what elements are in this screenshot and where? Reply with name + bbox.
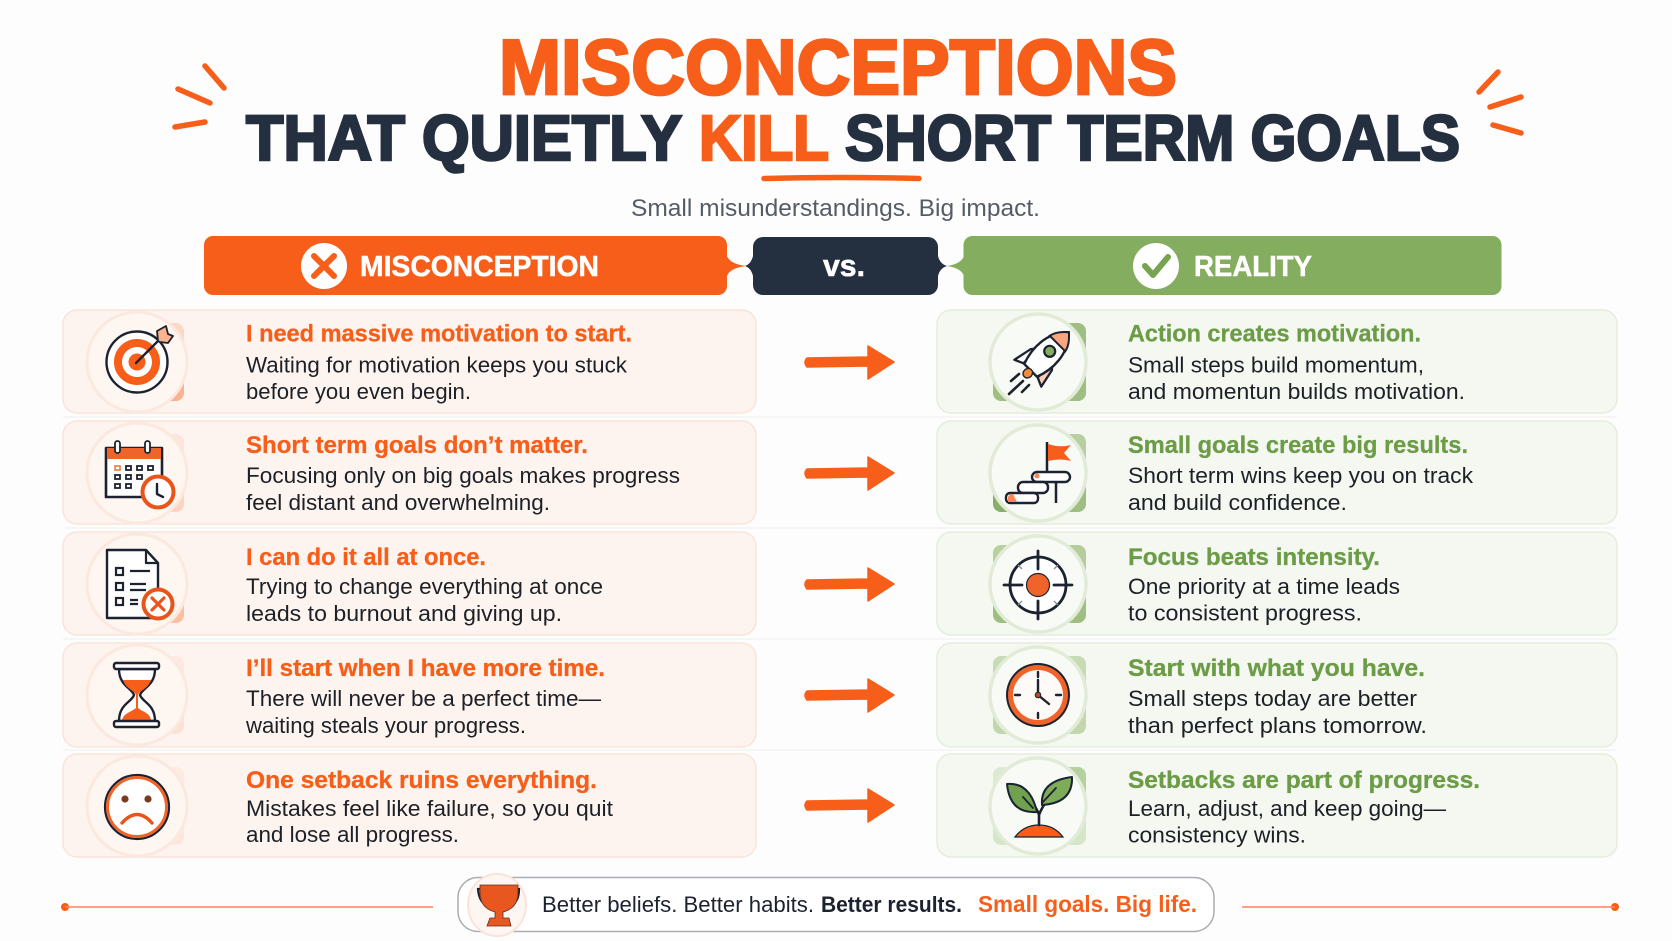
heading and text: I’ll start when I have more time. xyxy=(246,655,605,682)
heading and text: Learn, adjust, and keep going— xyxy=(1128,796,1446,821)
panel: reality row 2 xyxy=(937,421,1617,524)
footer right line xyxy=(1242,903,1619,911)
panel: reality row 1 xyxy=(937,310,1617,413)
heading and text: Small goals create big results. xyxy=(1128,432,1468,459)
title line 2 xyxy=(246,102,1460,174)
icon: checklist with x xyxy=(87,534,187,634)
icon: calendar with clock xyxy=(87,423,187,523)
heading and text: Short term goals don’t matter. xyxy=(246,432,588,459)
panel: reality row 3 xyxy=(937,532,1617,635)
heading and text: Mistakes feel like failure, so you quit xyxy=(246,796,613,821)
footer message: Better results. xyxy=(821,892,962,917)
arrow row 1 xyxy=(805,346,894,379)
icon: rocket xyxy=(990,314,1086,410)
heading and text: Setbacks are part of progress. xyxy=(1128,767,1480,794)
heading and text xyxy=(246,767,613,847)
heading and text: Trying to change everything at once xyxy=(246,574,603,599)
panel: reality row 4 xyxy=(937,643,1617,747)
heading and text: waiting steals your progress. xyxy=(245,713,526,738)
icon: trophy xyxy=(468,874,526,936)
heading and text xyxy=(246,544,603,626)
title underline xyxy=(764,178,919,179)
heading and text: Small steps today are better xyxy=(1128,686,1417,711)
heading and text xyxy=(1128,432,1474,515)
title line 2: SHORT TERM GOALS xyxy=(845,102,1460,174)
heading and text: Focus beats intensity. xyxy=(1128,544,1380,571)
arrow row 3 xyxy=(805,568,894,601)
icon: crosshair focus xyxy=(990,536,1086,632)
footer message: Small goals. Big life. xyxy=(978,891,1197,917)
arrow row 2 xyxy=(805,457,894,490)
heading and text xyxy=(1128,544,1400,626)
heading and text: consistency wins. xyxy=(1128,822,1306,848)
column header: misconception: MISCONCEPTION xyxy=(360,251,599,283)
column header: reality: REALITY xyxy=(1194,251,1312,283)
heading and text: I can do it all at once. xyxy=(246,544,486,571)
icon: sad face xyxy=(87,756,187,856)
heading and text xyxy=(246,320,632,404)
panel: reality row 5 xyxy=(937,754,1617,857)
subtitle: Small misunderstandings. Big impact. xyxy=(631,195,1040,222)
icon: right spark lines xyxy=(1479,72,1521,133)
heading and text: Action creates motivation. xyxy=(1128,320,1421,348)
icon: x circle xyxy=(301,243,347,289)
footer message xyxy=(542,891,1197,917)
heading and text: and build confidence. xyxy=(1128,490,1347,515)
icon: clock xyxy=(990,647,1086,743)
panel: misconception row 1 xyxy=(63,310,756,413)
heading and text: Small steps build momentum, xyxy=(1128,352,1424,378)
heading and text: feel distant and overwhelming. xyxy=(246,490,550,515)
heading and text xyxy=(1128,767,1480,848)
icon: sprout xyxy=(990,758,1086,854)
heading and text: Short term wins keep you on track xyxy=(1128,463,1474,488)
heading and text: than perfect plans tomorrow. xyxy=(1128,713,1427,738)
heading and text: There will never be a perfect time— xyxy=(246,686,601,711)
panel: misconception row 5 xyxy=(63,754,756,857)
heading and text: One setback ruins everything. xyxy=(246,767,597,794)
heading and text xyxy=(1128,655,1427,738)
heading and text: One priority at a time leads xyxy=(1128,574,1400,599)
title line 2: THAT QUIETLY xyxy=(246,102,682,174)
heading and text: leads to burnout and giving up. xyxy=(246,601,562,626)
column header: vs xyxy=(745,237,947,295)
title xyxy=(246,23,1460,174)
heading and text: and momentun builds motivation. xyxy=(1128,379,1465,404)
icon: check circle xyxy=(1133,243,1179,289)
heading and text: Focusing only on big goals makes progress xyxy=(246,463,680,488)
heading and text: Waiting for motivation keeps you stuck xyxy=(246,352,628,378)
heading and text: and lose all progress. xyxy=(246,822,459,847)
heading and text: Start with what you have. xyxy=(1128,655,1425,682)
footer left line xyxy=(61,903,433,911)
title line 2: KILL xyxy=(699,102,829,174)
icon: flag on stairs xyxy=(990,425,1086,521)
column header: vs: vs. xyxy=(823,248,865,283)
heading and text: before you even begin. xyxy=(246,379,471,404)
heading and text: I need massive motivation to start. xyxy=(246,320,632,348)
column header: misconception xyxy=(204,236,746,295)
icon: hourglass xyxy=(87,645,187,745)
footer message: Better beliefs. Better habits. xyxy=(542,892,814,917)
panel: misconception row 3 xyxy=(63,532,756,635)
column header: reality xyxy=(947,236,1502,295)
footer pill xyxy=(458,874,1214,936)
title line 1: MISCONCEPTIONS xyxy=(499,23,1177,111)
panel: misconception row 4 xyxy=(63,643,756,747)
icon: left spark lines xyxy=(175,66,224,127)
arrow row 4 xyxy=(805,679,894,712)
icon: target with arrow xyxy=(87,312,187,412)
heading and text: to consistent progress. xyxy=(1128,600,1362,626)
panel: misconception row 2 xyxy=(63,421,756,524)
heading and text xyxy=(245,655,605,738)
heading and text xyxy=(246,432,680,515)
arrow row 5 xyxy=(805,789,894,822)
heading and text xyxy=(1128,320,1465,404)
